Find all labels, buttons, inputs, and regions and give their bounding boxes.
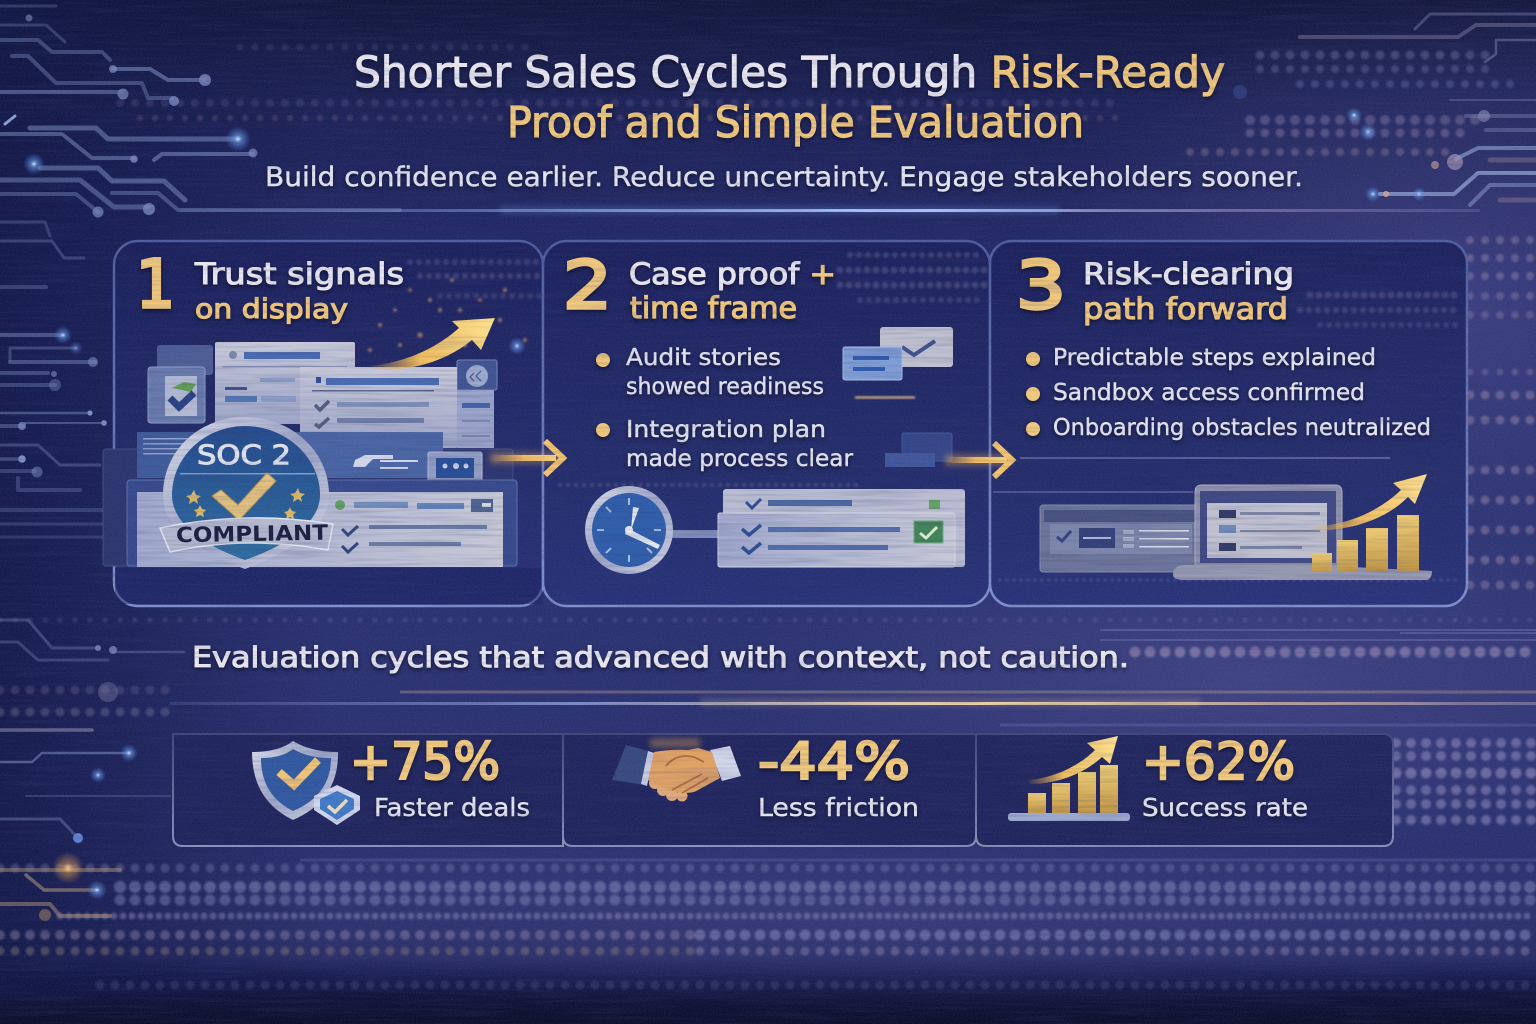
bullets: made process clear — [626, 446, 854, 472]
icon: faded window — [885, 433, 952, 467]
heading 3 — [1083, 257, 1294, 326]
heading 2: time frame — [630, 291, 797, 325]
illustration: document stack — [103, 342, 517, 567]
divider glow line top — [180, 206, 1480, 214]
bullets — [596, 345, 854, 472]
circuit traces left — [0, 6, 400, 916]
gold arrow up — [1312, 474, 1427, 531]
arrow: step 1 to 2 — [490, 441, 563, 475]
label: Less friction — [758, 793, 919, 822]
panel 2 frame — [543, 241, 990, 606]
subtitle: Build confidence earlier. Reduce uncertainty. Engage stakeholders sooner. — [265, 162, 1303, 193]
bullets: Predictable steps explained — [1053, 345, 1376, 371]
illustration: browser window — [1040, 505, 1200, 572]
stat card: success rate — [976, 733, 1393, 846]
icon: checklist card — [718, 489, 965, 567]
heading 2: Case proof + — [629, 257, 836, 291]
number 3: 3 — [1016, 247, 1066, 324]
icon: growth chart — [1008, 736, 1130, 821]
stat card: faster deals — [173, 733, 563, 846]
bullets — [1026, 345, 1431, 441]
circuit traces right — [1300, 14, 1536, 205]
bullets: Audit stories — [626, 345, 781, 371]
value: +75% — [350, 733, 500, 792]
icon: shield — [252, 741, 360, 825]
callout: evaluation statement: Evaluation cycles that advanced with context, not caution. — [192, 641, 1129, 674]
label: Success rate — [1142, 793, 1308, 822]
heading 3: path forward — [1083, 292, 1288, 326]
panel: case proof — [543, 241, 990, 606]
badge: SOC 2 compliant: SOC 2 — [197, 440, 291, 471]
title — [354, 48, 1225, 148]
heading 3: Risk-clearing — [1083, 257, 1294, 291]
panel 3 frame — [990, 241, 1467, 606]
badge: SOC 2 compliant: COMPLIANT — [176, 521, 329, 547]
bullets: Onboarding obstacles neutralized — [1053, 415, 1431, 441]
value: +62% — [1142, 733, 1295, 792]
circuit nodes right — [1233, 85, 1490, 202]
divider glow line bottom — [170, 698, 1536, 706]
number 2: 2 — [563, 247, 612, 324]
icon: clock — [585, 486, 725, 574]
bullets: Sandbox access confirmed — [1053, 380, 1365, 406]
badge: SOC 2 compliant — [160, 417, 333, 569]
sparkle dust — [368, 262, 540, 352]
icon: speech cards — [843, 327, 953, 399]
value: -44% — [758, 733, 910, 792]
panel: risk clearing — [990, 241, 1467, 606]
stat strip — [173, 733, 1393, 846]
title: Shorter Sales Cycles Through Risk-Ready — [354, 48, 1225, 98]
heading 2 — [629, 257, 836, 325]
panel: trust signals — [103, 241, 543, 606]
gold arrow up — [370, 318, 495, 370]
arrow: step 2 to 3 — [945, 443, 1012, 477]
bar chart — [1312, 515, 1419, 572]
title: Proof and Simple Evaluation — [507, 98, 1084, 148]
circuit nodes left — [5, 14, 258, 921]
bullets: Integration plan — [626, 417, 826, 443]
icon: handshake — [612, 738, 741, 802]
illustration: laptop — [1173, 485, 1432, 580]
bullets: showed readiness — [626, 374, 824, 400]
number 1: 1 — [136, 246, 175, 323]
panel 1 frame — [114, 241, 543, 606]
heading 1: on display — [195, 294, 348, 325]
heading 1: Trust signals — [194, 257, 404, 291]
label: Faster deals — [374, 793, 530, 822]
stat card: less friction — [563, 733, 976, 846]
heading 1 — [194, 257, 404, 325]
